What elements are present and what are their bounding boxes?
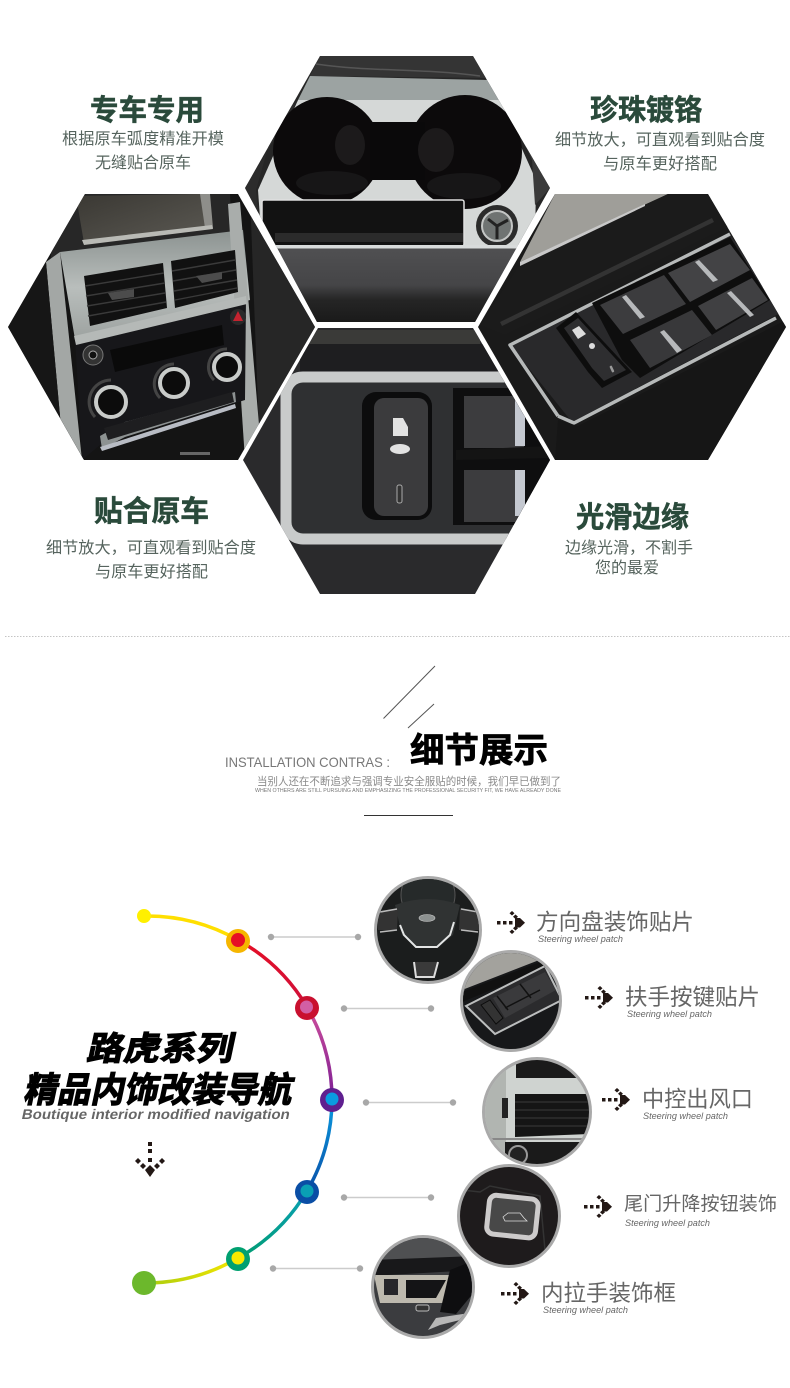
circle photo: air vents [482,1056,595,1172]
nav title [20,1031,298,1122]
label: 尾门升降按钮装饰: 尾门升降按钮装饰 [624,1193,777,1215]
heading block: 珍珠镀铬 [555,94,765,173]
heading block: 珍珠镀铬: 细节放大，可直观看到贴合度 [555,131,765,149]
heading block: 光滑边缘: 边缘光滑，不割手 [565,539,693,557]
label: 内拉手装饰框 [501,1281,676,1315]
silver bezel [258,100,536,248]
display screen [78,194,205,240]
photo hexagon: switch trim close-up [240,325,566,597]
heading block: 专车专用 [62,94,224,172]
heading block: 贴合原车: 细节放大，可直观看到贴合度 [46,539,256,557]
label: 方向盘装饰贴片: Steering wheel patch [538,934,623,944]
heading block: 专车专用: 专车专用 [90,94,204,127]
label: 扶手按键贴片: Steering wheel patch [627,1009,712,1019]
node 2 [295,996,319,1020]
nav title: 路虎系列 [84,1031,238,1068]
heading block: 珍珠镀铬: 珍珠镀铬 [590,94,702,127]
heading block: 贴合原车: 贴合原车 [94,495,209,528]
connectors [268,934,456,1272]
cup wells [273,95,522,209]
node 1 [226,929,250,953]
photo hexagon: cup holders [240,50,555,325]
right air vent [171,250,238,308]
node 3 [320,1088,344,1112]
label: 尾门升降按钮装饰: Steering wheel patch [625,1218,710,1228]
photo hexagon: centre console dashboard [0,190,320,465]
nav title: Boutique interior modified navigation [20,1106,292,1122]
section title block: INSTALLATION CONTRAS : [225,754,390,770]
icon: down arrow [135,1142,165,1177]
heading block: 专车专用: 无缝贴合原车 [95,154,191,172]
silver fascia [60,230,250,345]
climate knobs [96,354,240,417]
storage tray [262,200,464,246]
heading block: 光滑边缘 [565,501,693,577]
section title block: 细节展示 [410,732,548,770]
circle photo: steering wheel [374,876,482,984]
heading block: 光滑边缘: 您的最爱 [595,559,659,577]
label: 内拉手装饰框: 内拉手装饰框 [541,1281,676,1306]
heading block: 贴合原车: 与原车更好搭配 [95,563,208,581]
cigarette lighter [476,205,518,247]
section title block [225,666,562,816]
node 5 [226,1247,250,1271]
seat side [250,216,315,424]
lower console [277,248,516,322]
switch panel [510,234,782,422]
circle photo: tailgate button [456,1164,562,1268]
upper band [298,76,500,100]
left air vent [84,263,167,326]
photo hexagon: window switches [470,190,790,465]
circle photo: window switches [460,950,565,1052]
lock switch pill [362,392,432,520]
circle photo: door handle [370,1235,476,1339]
navigation arc [144,916,332,1283]
hazard button [230,309,246,325]
label: 扶手按键贴片 [585,985,760,1019]
label: 尾门升降按钮装饰 [584,1193,777,1228]
label: 扶手按键贴片: 扶手按键贴片 [625,985,760,1010]
label: 内拉手装饰框: Steering wheel patch [543,1305,628,1315]
small knob [83,345,103,365]
label: 中控出风口: 中控出风口 [642,1087,753,1112]
node 4 [295,1180,319,1204]
section title block: 当别人还在不断追求与强调专业安全服贴的时候，我们早已做到了 [257,774,561,788]
section title block: WHEN OTHERS ARE STILL PURSUING AND EMPHASIZING THE PROFESSIONAL SECURITY FIT, WE HAVE ALREADY DONE [255,788,562,794]
control panel [75,298,246,460]
leather trim [310,56,490,78]
end node [132,1271,156,1295]
label: 方向盘装饰贴片: 方向盘装饰贴片 [536,910,694,935]
door top band [654,194,728,228]
heading block: 贴合原车 [46,495,256,581]
silver trim frame [286,377,566,539]
heading block: 光滑边缘: 光滑边缘 [576,501,689,534]
nav title: 精品内饰改装导航 [21,1071,298,1110]
lock switch [556,312,632,388]
label: 中控出风口 [602,1087,753,1121]
concrete background [520,194,668,262]
label: 方向盘装饰贴片 [497,910,694,944]
heading block: 专车专用: 根据原车弧度精准开模 [62,130,224,148]
window switch keys [592,237,770,378]
start node [137,909,151,923]
label: 中控出风口: Steering wheel patch [643,1111,728,1121]
silver lower trim [100,392,236,449]
heading block: 珍珠镀铬: 与原车更好搭配 [603,155,717,173]
dashboard surround [50,194,232,262]
adjacent switch well [453,388,553,525]
